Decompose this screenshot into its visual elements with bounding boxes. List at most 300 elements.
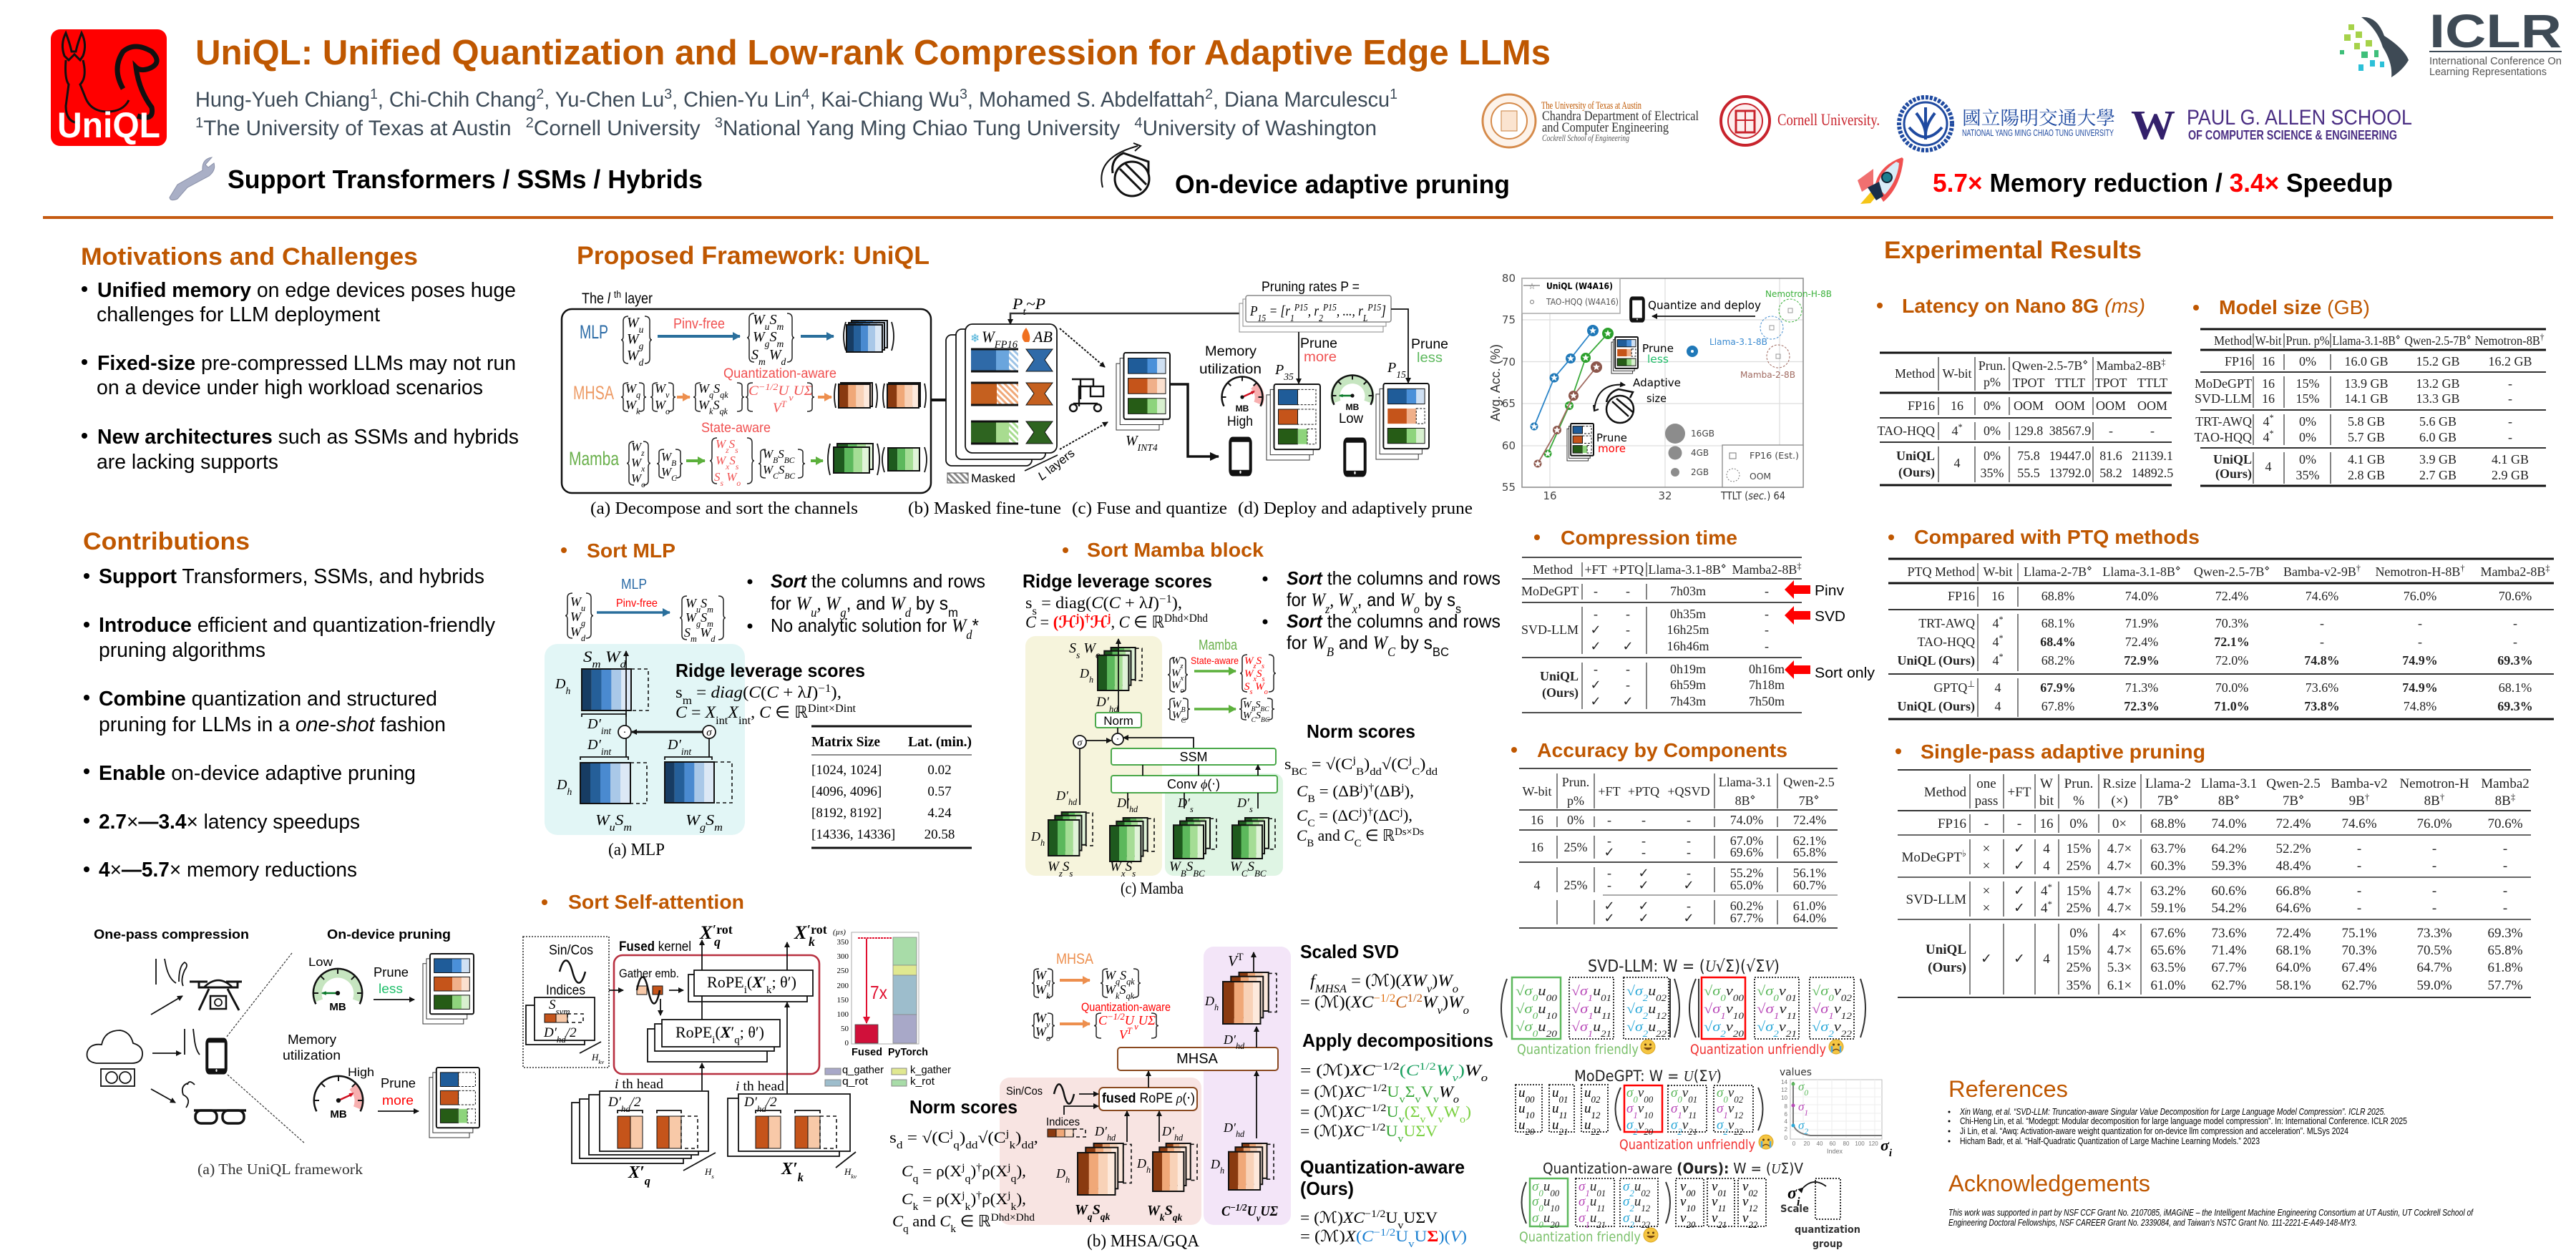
chart: singular values: 60	[1830, 1141, 1836, 1147]
table: single-pass pruning: 64.0%	[2275, 960, 2311, 975]
table: single-pass pruning: 52.2%	[2275, 841, 2311, 856]
table: latency: 0%	[1984, 399, 2001, 413]
text: apply decompositions	[1300, 1030, 1493, 1145]
text: MLP bullets	[747, 570, 985, 642]
table: latency: Qwen-2.5-7B⋄	[2012, 357, 2088, 373]
table: latency: -	[2109, 424, 2113, 438]
bar chart: kernel latency: 300	[837, 952, 849, 961]
diagram: Mamba block pruning: WzSs	[1048, 859, 1073, 879]
text: motivation bullets	[82, 279, 519, 474]
diagram: X q heads: X′q	[628, 1163, 650, 1188]
box: pruning rates stack	[1239, 296, 1391, 332]
text: MLP bullets: Sort the columns and rows	[771, 570, 985, 592]
block: MoDeGPT: σ2v20	[1626, 1118, 1654, 1136]
legend: kernel latency: q_rot	[842, 1075, 869, 1088]
table: single-pass pruning	[1898, 770, 2531, 997]
table: single-pass pruning: 4.7×	[2107, 859, 2132, 874]
label: prune more: more	[1304, 350, 1337, 365]
table: single-pass pruning: pass	[1975, 793, 1998, 809]
table: compression time: ✓	[1622, 694, 1634, 708]
table: latency: Method	[1895, 366, 1935, 381]
legend: memory size	[1665, 424, 1714, 477]
block: SVD-LLM: √σ 0u00	[1516, 984, 1558, 1003]
diagram: Mamba transform	[1168, 638, 1276, 724]
table: PTQ comparison: 74.9%	[2402, 653, 2438, 668]
text: ridge leverage scores: C = XintXint, C ∈ ℝDint×Dint	[675, 703, 857, 727]
arrow: rate to layers	[1010, 313, 1244, 324]
table: single-pass pruning: 4*	[2041, 899, 2052, 916]
diagram: Mamba block pruning: ⋅	[1116, 734, 1119, 744]
table: accuracy by components: 55.2%	[1730, 866, 1763, 880]
legend: kernel latency: q_gather	[842, 1064, 884, 1076]
label: quantize and deploy: Quantize and deploy	[1648, 298, 1761, 312]
label: sampled rate: Pt~P	[1012, 295, 1045, 318]
icon: rocket	[1858, 157, 1903, 204]
row: MHSA	[573, 366, 926, 416]
diagram: X q heads	[572, 1077, 716, 1188]
text: Mamba bullets: for Wz, Wx, and Wo by ss	[1287, 589, 1461, 616]
table: latency: TPOT	[2095, 376, 2127, 390]
arrows: pruning rates to devices	[1299, 309, 1408, 384]
diagram: Mamba block pruning: Dh	[1030, 829, 1045, 848]
table: accuracy by components: -	[1641, 845, 1646, 859]
logo: NYCU: NATIONAL YANG MING CHIAO TUNG UNIVERSITY	[1962, 127, 2114, 138]
table: latency: 4*	[1951, 422, 1963, 438]
table: single-pass pruning: one	[1976, 776, 1996, 791]
grid lines and frame	[1522, 278, 1803, 487]
table: accuracy by components: ✓	[1683, 911, 1694, 925]
block: MoDeGPT	[1516, 1068, 1773, 1153]
box: positional inputs: Sin/Cos	[549, 943, 593, 958]
chart: singular values: σ1	[1798, 1100, 1808, 1118]
table: accuracy by components: -	[1607, 813, 1611, 827]
row: MHSA: Wv	[655, 381, 670, 400]
table: model size: 15%	[2296, 391, 2320, 406]
gauge: high: MB	[1236, 404, 1249, 414]
box: positional inputs: Ssym	[549, 997, 570, 1016]
table: single-pass pruning: 7B⋄	[2283, 791, 2304, 809]
table: PTQ comparison: 70.3%	[2215, 616, 2248, 630]
OOM markers and labels: Llama-3.1-8B	[1709, 337, 1767, 347]
label: W INT4: WINT4	[1126, 433, 1158, 452]
axis tick labels: 60	[1502, 439, 1516, 452]
table: accuracy by components: -	[1607, 866, 1611, 880]
table: accuracy by components: 60.7%	[1793, 878, 1826, 892]
text: ridge leverage scores	[675, 660, 865, 727]
block: SVD-LLM: Quantization unfriendly	[1690, 1042, 1826, 1058]
row: MLP: WuSm	[753, 312, 784, 332]
table: accuracy by components: 67.7%	[1730, 911, 1763, 925]
block: SVD-LLM: √σ 0u20	[1516, 1020, 1558, 1039]
icon: wrench	[170, 157, 215, 200]
stack: V transpose: VT	[1228, 952, 1244, 970]
table: model size: 16	[2262, 376, 2275, 391]
table: single-pass pruning: 15%	[2067, 841, 2092, 856]
box: fused kernel: Fused kernel	[619, 939, 691, 954]
table: PTQ comparison: 70.6%	[2499, 589, 2532, 603]
label: high: High	[348, 1065, 374, 1079]
label: one-pass compression: One-pass compression	[94, 927, 249, 942]
axis tick labels: 80	[1502, 272, 1516, 285]
text: norm scores: CB = (ΔBj)†(ΔBj),	[1297, 782, 1414, 805]
block: MoDeGPT: σ1v12	[1717, 1101, 1744, 1120]
text: Mamba bullets: Sort the columns and rows	[1287, 567, 1501, 589]
row: Mamba: WCSBC	[763, 463, 795, 481]
table: single-pass pruning: -	[2503, 859, 2507, 874]
figure: UniQL framework overview	[87, 927, 479, 1178]
row: Mamba: WBSBC	[763, 447, 795, 465]
label: prune more	[1596, 431, 1627, 455]
icon: llama	[185, 1029, 200, 1055]
table: PTQ comparison: Llama-2-7B⋄	[2024, 563, 2092, 579]
arrows from cloud	[151, 996, 182, 1103]
header: logo	[51, 29, 167, 146]
caption: (c) Mamba	[1121, 879, 1184, 897]
table: latency: 75.8	[2017, 449, 2040, 463]
icon: adaptive dial	[1101, 143, 1149, 196]
label: prune more	[381, 1076, 416, 1108]
label: prune more: Prune	[1596, 431, 1627, 444]
block: Quantization-aware ours: Quantization-aware (Ours): W = (UΣ)V	[1543, 1160, 1803, 1177]
gauge: high memory: MB	[330, 1108, 347, 1120]
table: accuracy by components: +PTQ	[1628, 784, 1659, 799]
table: single-pass pruning: 15%	[2067, 943, 2092, 958]
chart: singular values: Index	[1827, 1148, 1843, 1155]
table: latency: OOM	[2096, 399, 2126, 413]
text: contribution bullets: Support Transformers, SSMs, and hybrids	[99, 565, 484, 588]
table: accuracy by components: -	[1687, 845, 1691, 859]
table: compression time: 0h16m	[1749, 662, 1785, 676]
row: MHSA: VT	[773, 398, 787, 416]
table: single-pass pruning: ×	[1983, 901, 1990, 916]
table: model size: TAO-HQQ	[2194, 430, 2252, 444]
caption: (a) MLP	[608, 841, 665, 859]
block: SVD-LLM: √σ1u21	[1571, 1020, 1611, 1039]
block: MoDeGPT: σ2v22	[1717, 1118, 1744, 1136]
table: model size: 15%	[2296, 376, 2320, 391]
table: PTQ comparison: UniQL (Ours)	[1897, 653, 1975, 668]
table: PTQ comparison: -	[2320, 616, 2324, 630]
chart: singular values: 0	[1785, 1135, 1788, 1141]
legend: kernel latency: k_gather	[910, 1064, 951, 1076]
table: latency: 129.8	[2014, 424, 2043, 438]
table: single-pass pruning: UniQL	[1926, 942, 1966, 957]
table: accuracy by components: Prun.	[1562, 775, 1589, 789]
affiliations: 1The University of Texas at Austin 2Cornell University 3National Yang Ming Chiao Tung University 4University of Washington	[195, 115, 1377, 140]
captions: (a) Decompose and sort the channels	[590, 499, 858, 518]
table: accuracy by components: 16	[1531, 840, 1543, 854]
heading: motivations: Motivations and Challenges	[81, 243, 418, 270]
table: latency: 58.2	[2099, 466, 2122, 480]
logo: UW Allen School	[2131, 102, 2412, 148]
table: single-pass pruning: -	[2503, 841, 2507, 856]
table: single-pass pruning: SVD-LLM	[1906, 892, 1966, 907]
table: latency: FP16	[1908, 399, 1935, 413]
OOM markers and labels: Nemotron-H-8B	[1765, 289, 1832, 299]
row: Mamba: Ss Wo	[714, 470, 741, 488]
chart: singular values: 80	[1843, 1141, 1850, 1147]
text: apply decompositions: Apply decompositions	[1302, 1030, 1493, 1051]
table: accuracy by components: 7B⋄	[1799, 792, 1819, 808]
table: accuracy by components: ✓	[1604, 911, 1615, 925]
table: single-pass pruning: 4	[2043, 952, 2050, 967]
table: single-pass pruning: ✓	[2014, 859, 2025, 874]
table: accuracy by components: 4	[1534, 878, 1540, 892]
diagram: MHSA transform: WqSqk	[1105, 968, 1135, 987]
table: PTQ comparison: 72.9%	[2124, 653, 2160, 668]
stack: deployed pruned less	[1376, 384, 1429, 459]
block: Quantization-aware ours: σ1u21	[1579, 1211, 1606, 1229]
inputs: sin/cos and indices: Indices	[1046, 1116, 1080, 1128]
block: SVD-LLM: √σ 0v02	[1812, 984, 1853, 1003]
table: model size: -	[2508, 391, 2512, 406]
labels: X q rot and X k rot: X	[794, 922, 807, 943]
block: Quantization-aware ours: v20	[1680, 1211, 1696, 1229]
table: compression time: -	[1765, 622, 1769, 637]
table: single-pass pruning: 63.5%	[2150, 960, 2186, 975]
panel: MLP diagram background	[545, 644, 745, 835]
table: single-pass pruning: 59.3%	[2211, 859, 2247, 874]
chart: singular values	[1780, 1067, 1893, 1159]
table: single-pass pruning: 69.3%	[2487, 926, 2523, 941]
block: MoDeGPT: σ0v02	[1717, 1085, 1744, 1105]
table: latency: Mamba2-8B‡	[2096, 357, 2166, 373]
block: MoDeGPT: u01	[1552, 1085, 1568, 1105]
table: latency: TAO-HQQ	[1877, 424, 1935, 438]
label: frozen and trainable	[970, 328, 1053, 351]
table: model size: 13.3 GB	[2416, 391, 2460, 406]
panel: single-pass adaptive pruning	[1896, 741, 2531, 997]
table: compression time: ✓	[1622, 639, 1634, 653]
table: compression time: -	[1594, 662, 1598, 676]
table: single-pass pruning: 4.7×	[2107, 901, 2132, 916]
table: PTQ comparison: 71.3%	[2125, 680, 2158, 695]
table: model size: 5.7 GB	[2348, 430, 2385, 444]
panel: sort self-attention	[523, 891, 951, 1188]
diagram: MHSA transform: Wk	[1035, 982, 1050, 1001]
title: UniQL: Unified Quantization and Low-rank Compression for Adaptive Edge LLMs	[195, 34, 1551, 72]
table: model size: W-bit	[2255, 333, 2281, 348]
stack: W INT4	[1116, 353, 1170, 430]
box: positional inputs: Indices	[546, 983, 585, 998]
header: logo: UniQL	[57, 105, 160, 145]
table: single-pass pruning: R.size	[2103, 776, 2136, 791]
block: SVD-LLM: √σ 1u11	[1571, 1002, 1611, 1020]
block: SVD-LLM: √σ 1v12	[1812, 1002, 1853, 1020]
labels: P35 and P15: P15	[1387, 360, 1406, 379]
table: single-pass pruning: ✓	[2014, 841, 2025, 856]
table: single-pass pruning: 61.8%	[2487, 960, 2523, 975]
table: PTQ comparison: 4	[1995, 680, 2001, 695]
table: single-pass pruning: 4	[2043, 841, 2050, 856]
text: motivation bullets: on a device under high workload scenarios	[97, 376, 483, 399]
callout: scale and quantization group: group	[1813, 1239, 1843, 1250]
table: single-pass pruning: Nemotron-H	[2399, 776, 2469, 791]
gauge: low memory	[313, 969, 362, 1013]
block: MoDeGPT: u10	[1518, 1101, 1535, 1120]
table: single-pass pruning: 8B‡	[2495, 791, 2516, 809]
text: quantization-aware derivation: (Ours)	[1300, 1178, 1354, 1199]
block: SVD-LLM: √σ 2v21	[1757, 1020, 1797, 1039]
heading: experimental results: Experimental Results	[1884, 237, 2142, 264]
stacks: Wq, Wk, C U: C−1/2UvUΣ	[1221, 1202, 1279, 1224]
label: prune less	[1642, 342, 1674, 366]
labels: X q rot and X k rot: ′rot	[713, 922, 733, 937]
diagram: Mamba block pruning: σ	[1078, 738, 1083, 748]
panel: accuracy by components	[1511, 739, 1838, 928]
row: MLP: Sm Wd	[751, 347, 786, 366]
table: single-pass pruning: ×	[1983, 841, 1990, 856]
block: MoDeGPT: σ2v21	[1671, 1118, 1697, 1136]
panel: decomposition comparison	[1501, 957, 1893, 1250]
text: norm scores	[889, 1096, 1038, 1235]
table: latency: 16	[1951, 399, 1963, 413]
legend: masked: Masked	[971, 472, 1015, 485]
legend: marker types: FP16 (Est.)	[1750, 451, 1799, 461]
diagram: Mamba transform: WC	[1172, 710, 1186, 724]
chart: singular values: 100	[1855, 1141, 1865, 1147]
axis tick labels: 32	[1658, 489, 1672, 502]
table: single-pass pruning: 25%	[2067, 859, 2092, 874]
diagram: MLP transform: Wd	[570, 625, 586, 643]
box: MHSA	[1118, 1047, 1278, 1070]
table: accuracy by components: ✓	[1638, 899, 1649, 913]
table: compression time: UniQL	[1540, 669, 1579, 683]
text: norm scores: Norm scores	[1307, 721, 1415, 742]
diagram: Mamba transform: WxSs	[1244, 668, 1265, 683]
row: Mamba: WxSs	[716, 454, 739, 471]
stacks: Wq, Wk, C U	[1055, 1120, 1279, 1224]
arrow: Pinv: Pinv	[1815, 583, 1844, 599]
table: model size: 16	[2262, 391, 2275, 406]
arrow: prune less	[374, 999, 414, 1000]
icon: phone	[207, 1039, 226, 1073]
table: SVD latency by matrix size: [8192, 8192]	[811, 806, 882, 821]
table: single-pass pruning: 6.1×	[2107, 978, 2132, 993]
table: compression time: ✓	[1590, 694, 1601, 708]
table: model size	[2194, 329, 2546, 486]
diagram: MLP transform: Wg	[570, 610, 585, 628]
table: latency: 21139.1	[2132, 449, 2173, 463]
table: single-pass pruning: 8B†	[2424, 791, 2445, 809]
row: Mamba: Wx	[631, 456, 645, 474]
label: prune more: Prune	[381, 1076, 416, 1090]
block: MoDeGPT: u22	[1584, 1118, 1601, 1136]
table: accuracy by components: Qwen-2.5	[1783, 775, 1835, 789]
diagram: Mamba transform: State-aware	[1191, 655, 1239, 666]
block: Quantization-aware ours: v21	[1712, 1211, 1727, 1229]
diagram: MLP transform: WuSm	[686, 596, 713, 615]
row: MHSA: WqSqk	[698, 381, 728, 400]
heading: Model size (GB)	[2219, 296, 2370, 318]
diagram: MLP pruning blocks: ⋅	[623, 726, 626, 738]
diagram: MHSA transform: VT	[1119, 1026, 1133, 1042]
table: PTQ comparison: 74.9%	[2402, 680, 2438, 695]
legend: memory size: 2GB	[1691, 467, 1709, 477]
label: frozen and trainable: AB	[1032, 328, 1053, 346]
series: green Nemotron	[1544, 328, 1614, 458]
table: single-pass pruning: 68.8%	[2150, 816, 2186, 831]
table: compression time: -	[1594, 607, 1598, 621]
table: PTQ comparison: TAO-HQQ	[1917, 635, 1975, 649]
table: accuracy by components: ✓	[1638, 866, 1649, 880]
label: memory utilization: Memory	[1205, 344, 1257, 359]
label: prune less: Prune	[1411, 337, 1448, 352]
table: compression time: ✓	[1590, 678, 1601, 692]
legend: kernel latency	[825, 1064, 951, 1088]
heading: Latency on Nano 8G (ms)	[1902, 295, 2145, 317]
diagram: Mamba transform: WBSBC	[1243, 700, 1269, 713]
panel: decompose and sort	[562, 309, 931, 493]
text: scaled SVD derivation	[1300, 941, 1469, 1016]
arrow: Sort only: Sort only	[1815, 665, 1875, 681]
table: compression time: ✓	[1590, 639, 1601, 653]
bar chart: kernel latency: 350	[837, 938, 849, 947]
table: compression time: Llama-3.1-8B⋄	[1648, 561, 1727, 577]
diagram: MHSA transform: Quantization-aware	[1081, 1000, 1171, 1014]
table: accuracy by components: ✓	[1638, 911, 1649, 925]
table: PTQ comparison: -	[2320, 635, 2324, 649]
block: MoDeGPT: Quantization unfriendly	[1619, 1137, 1755, 1153]
block: SVD-LLM: √σ1u01	[1571, 984, 1611, 1003]
table: single-pass pruning: ✓	[2014, 952, 2025, 967]
labels: X q rot and X k rot	[699, 922, 827, 949]
label: prune more: more	[1598, 442, 1626, 455]
table: single-pass pruning: ✓	[2014, 901, 2025, 916]
table: accuracy by components: 25%	[1564, 878, 1587, 892]
table: latency: 81.6	[2099, 449, 2122, 463]
table: compression time: -	[1626, 607, 1630, 621]
arrows: dotted to fuse	[1060, 328, 1108, 449]
table: single-pass pruning: Llama-2	[2145, 776, 2191, 791]
label: prune less: Prune	[1642, 342, 1674, 355]
table: model size: MoDeGPT	[2195, 376, 2252, 391]
table: accuracy by components: 67.0%	[1730, 834, 1763, 848]
table: SVD latency by matrix size: 0.02	[927, 763, 952, 778]
stack: pruned less	[423, 954, 474, 1024]
table: single-pass pruning: 72.4%	[2275, 816, 2311, 831]
table: latency: UniQL	[1896, 449, 1935, 463]
diagram: MLP transform: MLP	[621, 577, 647, 592]
diagram: Mamba block pruning: SSM	[1179, 750, 1208, 764]
diagram: Mamba block pruning: WCSBC	[1230, 859, 1267, 879]
logo: UW Allen School: OF COMPUTER SCIENCE & ENGINEERING	[2188, 128, 2397, 142]
row: MHSA: C−1/2UvUΣ	[748, 381, 813, 402]
table: PTQ comparison: FP16	[1948, 589, 1975, 603]
table: latency: W-bit	[1942, 366, 1972, 381]
icon: phones	[1230, 439, 1365, 475]
label: prune less: Prune	[374, 965, 409, 980]
text: ridge leverage scores: ss = diag(C(C + λI)−1),	[1025, 592, 1182, 617]
label: prune less	[374, 965, 409, 996]
table: PTQ comparison: 68.4%	[2040, 635, 2076, 649]
stacks: Wq, Wk, C U: Dh	[1210, 1157, 1224, 1176]
text: norm scores: Ck = ρ(Xj k)†ρ(Xj k),	[902, 1190, 1026, 1213]
text: contribution bullets: Combine quantization and structured	[99, 688, 437, 710]
label: memory utilization	[1199, 344, 1262, 377]
diagram: Mamba block pruning: Ss Wo	[1069, 640, 1101, 660]
table: accuracy by components: 65.8%	[1793, 845, 1826, 859]
table: single-pass pruning: 67.4%	[2341, 960, 2377, 975]
table: compression time: -	[1594, 584, 1598, 598]
table: single-pass pruning: 4.7×	[2107, 943, 2132, 958]
diagram: Mamba transform: Mamba	[1199, 638, 1238, 653]
row: MLP	[580, 312, 894, 368]
table: SVD latency by matrix size: 4.24	[927, 806, 952, 821]
table: latency: -	[2150, 424, 2155, 438]
diagram: Mamba block pruning: D′hd	[1096, 695, 1118, 714]
row: Mamba: WB	[661, 450, 676, 468]
